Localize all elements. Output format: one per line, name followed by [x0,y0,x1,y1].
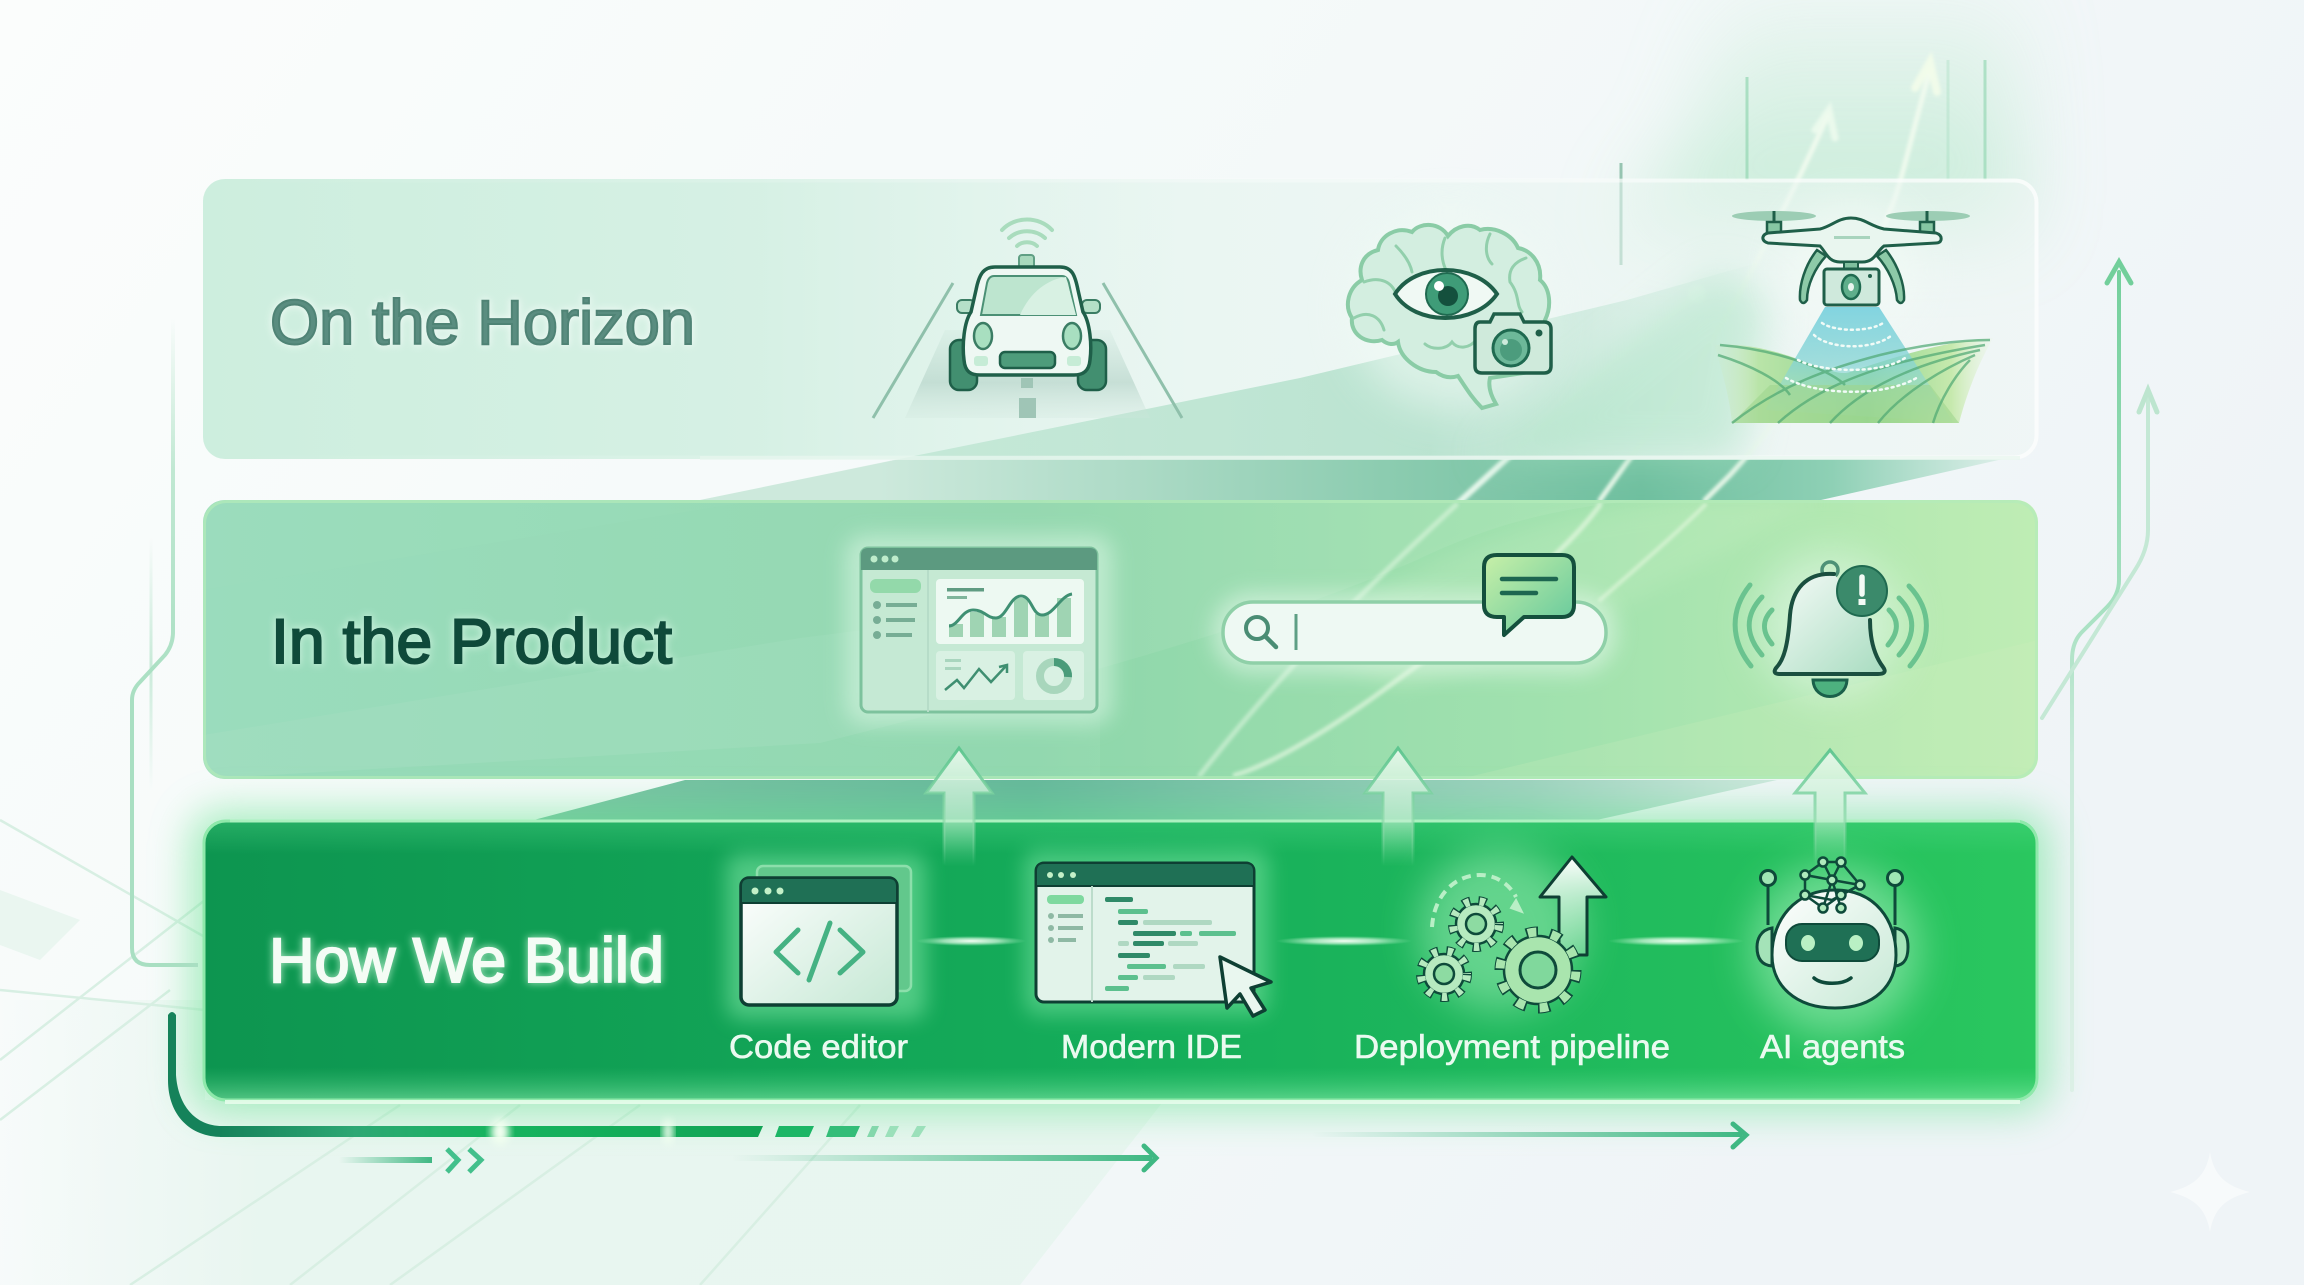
icon: AI agent robot [1750,858,1920,1035]
right rising arrow, short [2042,390,2157,718]
arrow: up from deployment pipeline [1365,748,1431,866]
label: Code editor: Code editor [729,1028,908,1065]
right rising arrow, tall [2072,262,2131,1090]
left rising line [132,318,198,965]
heading: How We Build: How We Build [269,926,664,996]
panel: How We Build [190,748,2050,1112]
bottom L-shaped progress line [168,1012,926,1145]
icon: deployment pipeline gears [1418,848,1606,1012]
icon: code editor [726,854,926,1019]
arrow: short chevrons [339,1149,481,1172]
panel: On the Horizon [203,179,2038,475]
icon: notification bell [1735,553,1926,697]
heading: On the Horizon: On the Horizon [270,288,695,358]
heading: How We Build: How We Build [269,926,664,996]
label: AI agents: AI agents [1760,1028,1905,1065]
icon: search bar with chat bubble [1212,555,1617,674]
icon: modern IDE with cursor [1024,850,1271,1016]
arrow: up from AI agents [1795,750,1865,866]
arrow: right long [1312,1124,1746,1147]
heading: In the Product: In the Product [271,607,673,677]
heading: On the Horizon: On the Horizon [270,288,695,358]
icon: analytics dashboard [845,535,1113,725]
icon: brain with eye and camera [1348,210,1551,410]
icon: self-driving car on road [873,220,1182,418]
connector glows [916,936,1744,946]
swooshes crossing the product panel [1200,505,1705,775]
arrow: up from code editor [926,748,992,866]
heading: In the Product: In the Product [271,607,673,677]
label: Modern IDE: Modern IDE [1061,1028,1242,1065]
decorative sparkle star [2170,1152,2250,1232]
vertical accent lines at top right [1621,60,1985,265]
panel: In the Product [203,500,2038,779]
label: Deployment pipeline: Deployment pipeline [1354,1028,1670,1065]
arrow: middle long [732,1146,1156,1170]
rising glowing swooshes behind the top panel [1456,62,1937,505]
icon: drone scanning farm field [1714,200,1993,423]
background wedge: gaps between panels [530,459,2003,821]
